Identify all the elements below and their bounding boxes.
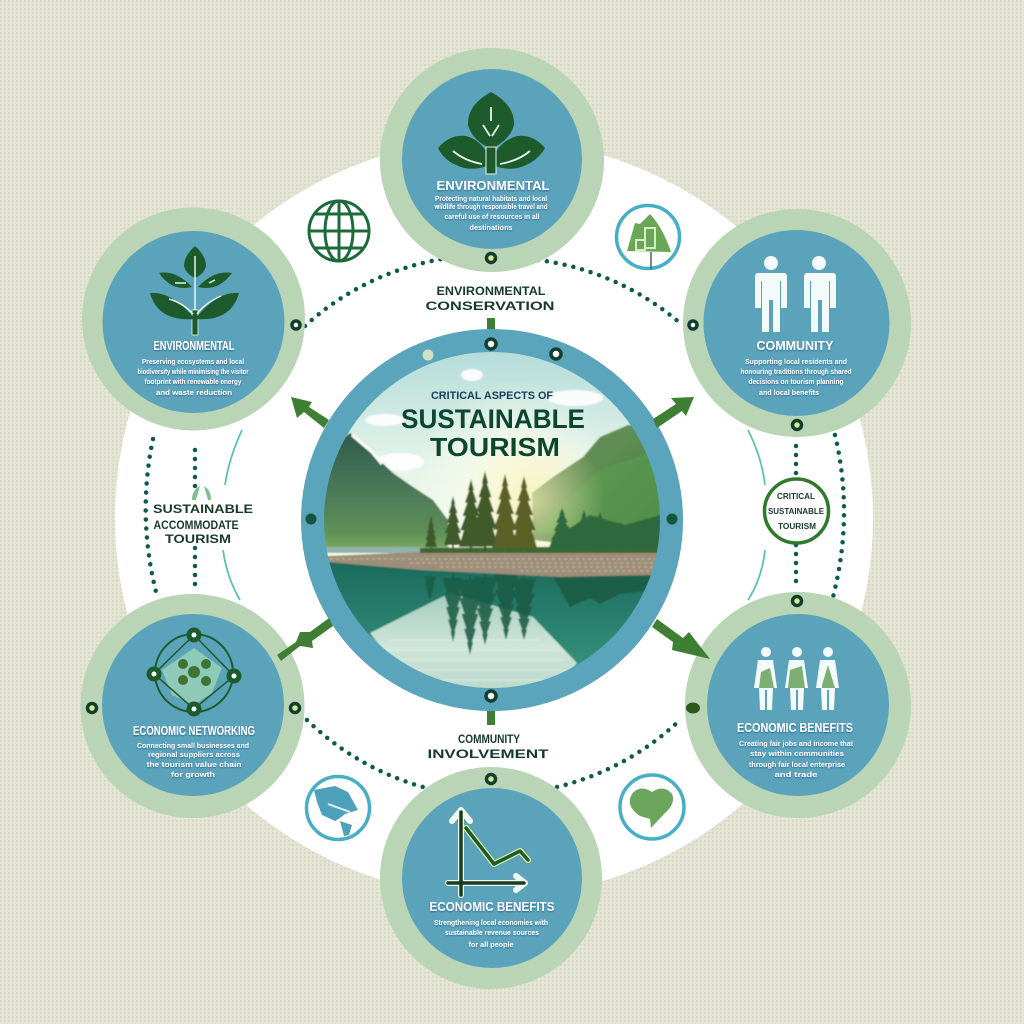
label: sustainable practices, left: TOURISM [165,532,231,546]
label: sustainable practices, left [150,486,256,546]
badge: right label: TOURISM [778,522,816,531]
hub title: SUSTAINABLE [401,404,585,434]
icon: wireframe globe [309,201,369,261]
heading and body: through fair local enterprise [749,762,845,769]
panel: economic benefits (bottom) [380,767,602,989]
label: conservation: CONSERVATION [426,299,554,313]
heading and body: and local benefits [759,390,819,397]
heading and body: ECONOMIC BENEFITS [430,899,555,914]
heading and body: ENVIRONMENTAL [436,178,550,193]
connector dot [486,774,496,784]
label: conservation [426,284,554,313]
panel: environmental (top) [380,48,604,272]
heading and body [138,338,249,397]
dotted connector arcs [146,259,844,787]
heading and body [740,338,852,397]
heading and body: ECONOMIC BENEFITS [737,720,853,735]
heading and body: Creating fair jobs and income that [739,741,854,748]
icon: green tree badge [616,206,680,269]
icon: line chart [448,810,528,895]
heading and body: biodiversity while minimising the visitor [138,369,249,376]
badge: right label [764,479,828,543]
heading and body: stay within communities [750,751,844,758]
arrow: upper right [653,397,694,428]
heading and body: and trade [774,772,818,779]
heading and body: honouring traditions through shared [740,369,852,376]
label: community involvement: COMMUNITY [458,732,520,746]
arrow: upper left [291,397,329,428]
arrow: lower right [652,619,710,659]
heading and body: wildlife through responsible travel and [434,204,548,211]
heading and body: ENVIRONMENTAL [154,338,235,353]
icon: heart badge [620,775,684,839]
heading and body: and waste reduction [156,390,232,397]
label: sustainable practices, left: ACCOMMODATE [154,518,238,532]
label: community involvement: INVOLVEMENT [428,747,549,761]
connector dots [689,321,802,430]
panel: environmental (upper left) [82,208,305,430]
connector dots [88,704,300,712]
heading and body: regional suppliers across [148,752,240,759]
connector dot [292,321,300,329]
hub ring [301,329,683,711]
heading and body: COMMUNITY [756,338,834,353]
arrow: lower left [277,618,333,661]
hub title: CRITICAL ASPECTS OF [431,390,553,402]
central hub [301,318,683,725]
panel: economic benefits (lower right) [685,592,911,818]
heading and body: destinations [470,225,513,232]
connector dots [792,596,802,606]
heading and body [737,720,854,779]
heading and body [434,178,550,232]
label: conservation: ENVIRONMENTAL [436,284,546,298]
icon: plant [150,246,239,335]
hub ring dots [306,339,678,701]
panel: community (upper right) [683,209,911,437]
heading and body: the tourism value chain [146,762,242,769]
heading and body: Preserving ecosystems and local [142,359,244,366]
heading and body: decisions on tourism planning [748,379,844,386]
thin teal arcs [223,430,765,600]
label: community involvement [428,732,549,761]
heading and body: for growth [171,772,215,779]
icon: world badge [306,776,370,840]
heading and body [430,899,555,949]
heading and body [133,723,255,779]
heading and body: for all people [468,942,514,949]
white central disc [115,139,873,897]
badge: right label: CRITICAL [777,492,815,501]
hub stems [487,318,495,725]
icon: two people [755,256,836,332]
panel: economic networking (lower left) [80,594,304,818]
arrows from centre [277,397,710,661]
badge: right label: SUSTAINABLE [768,507,825,516]
connector dot [486,254,496,262]
heading and body: Protecting natural habitats and local [435,196,547,203]
heading and body: careful use of resources in all [444,214,540,221]
heading and body: footprint with renewable energy [144,379,242,386]
hub title: TOURISM [430,432,560,462]
icon: three people [754,647,839,710]
heading and body: sustainable revenue sources [445,930,539,937]
heading and body: Strengthening local economies with [434,920,548,927]
hub photo: mountain lake [320,350,665,700]
icon: network globe [149,630,239,714]
label: sustainable practices, left: SUSTAINABLE [153,502,253,516]
heading and body: Supporting local residents and [745,359,847,366]
heading and body: ECONOMIC NETWORKING [133,723,255,738]
hub title [401,390,585,462]
heading and body: Connecting small businesses and [137,743,249,750]
icon: three leaves [438,92,545,174]
